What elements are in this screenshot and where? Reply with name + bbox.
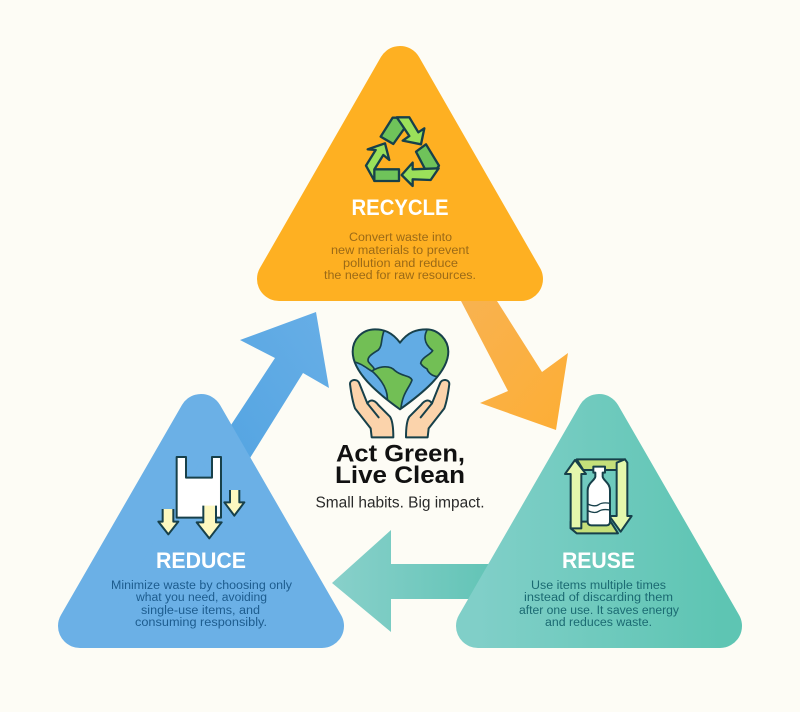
text: reuse description: instead of discarding them bbox=[524, 592, 673, 604]
text: reduce description: what you need, avoiding bbox=[135, 592, 267, 604]
icon: bottle with reuse arrows bbox=[565, 459, 632, 533]
text: reduce description: consuming responsibly. bbox=[135, 617, 267, 629]
text: recycle description: the need for raw resources. bbox=[324, 270, 476, 282]
title: Live Clean bbox=[335, 462, 465, 489]
icon: recycle symbol bbox=[366, 117, 439, 186]
reduce triangle bbox=[80, 416, 322, 626]
panel: reuse bbox=[478, 416, 720, 629]
text: reuse description: after one use. It saves energy bbox=[519, 605, 679, 617]
text: reduce description: single-use items, and bbox=[141, 605, 260, 617]
panel: reduce bbox=[80, 416, 322, 629]
text: recycle description: new materials to prevent bbox=[331, 245, 470, 257]
tagline: Small habits. Big impact. bbox=[316, 494, 484, 512]
text: recycle description bbox=[324, 232, 476, 282]
icon: plastic bag with down arrows bbox=[158, 457, 244, 538]
heading: recycle: RECYCLE bbox=[352, 195, 448, 220]
recycle triangle bbox=[279, 68, 521, 279]
text: reuse description bbox=[519, 580, 679, 629]
title bbox=[335, 440, 465, 489]
text: reuse description: Use items multiple times bbox=[531, 580, 666, 592]
heading: reuse: REUSE bbox=[562, 548, 635, 573]
icon: earth heart in hands bbox=[347, 323, 455, 437]
arrow: reduce to recycle bbox=[231, 312, 329, 458]
text: recycle description: pollution and reduce bbox=[343, 258, 458, 270]
reuse triangle bbox=[478, 416, 720, 626]
text: reuse description: and reduces waste. bbox=[545, 617, 652, 629]
center emblem bbox=[316, 323, 484, 512]
heading: reduce: REDUCE bbox=[156, 548, 246, 573]
panel: recycle bbox=[279, 68, 521, 282]
arrow: recycle to reuse bbox=[461, 301, 568, 430]
text: recycle description: Convert waste into bbox=[349, 232, 452, 244]
arrow: reuse to reduce bbox=[332, 530, 495, 632]
text: reduce description: Minimize waste by choosing only bbox=[111, 580, 292, 592]
text: reduce description bbox=[111, 580, 292, 629]
title: Act Green, bbox=[336, 440, 465, 468]
